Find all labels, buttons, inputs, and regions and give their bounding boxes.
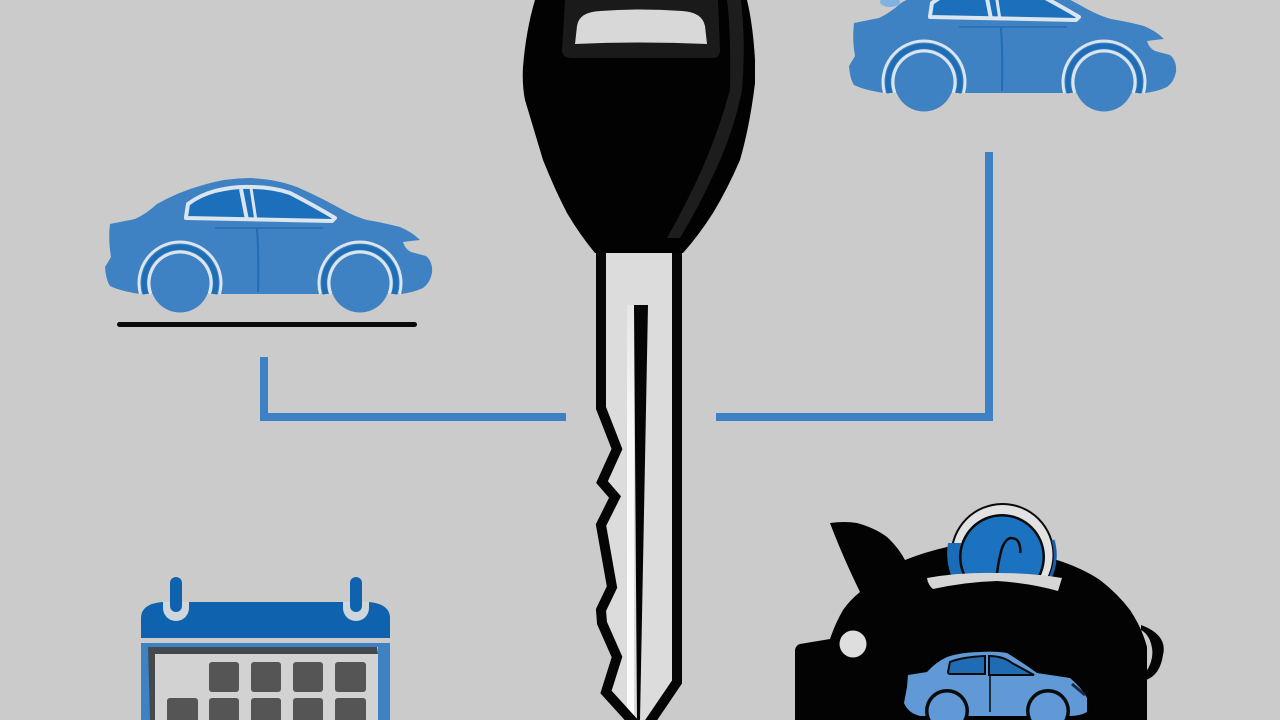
calendar body <box>141 643 390 720</box>
coin <box>947 503 1057 576</box>
calendar ring right <box>343 577 369 621</box>
key head <box>523 0 755 253</box>
icon: blue car left <box>105 178 432 312</box>
coin slot <box>927 573 1062 591</box>
icon: car key <box>523 0 755 720</box>
key blade <box>601 250 677 720</box>
icon: blue car top right <box>849 0 1176 112</box>
arrow: connector from left car to key <box>264 357 566 417</box>
pig eye <box>840 630 866 658</box>
icon: piggy bank <box>795 503 1164 720</box>
pig body <box>795 522 1147 720</box>
small blue car on pig <box>904 652 1087 720</box>
arrow: connector from key to top right car <box>716 152 989 417</box>
pig tail <box>1141 625 1164 680</box>
calendar date grid <box>167 662 366 720</box>
calendar header <box>141 602 390 638</box>
calendar ring left <box>163 577 189 621</box>
icon: calendar <box>141 577 390 720</box>
ground shadow line <box>117 322 417 327</box>
